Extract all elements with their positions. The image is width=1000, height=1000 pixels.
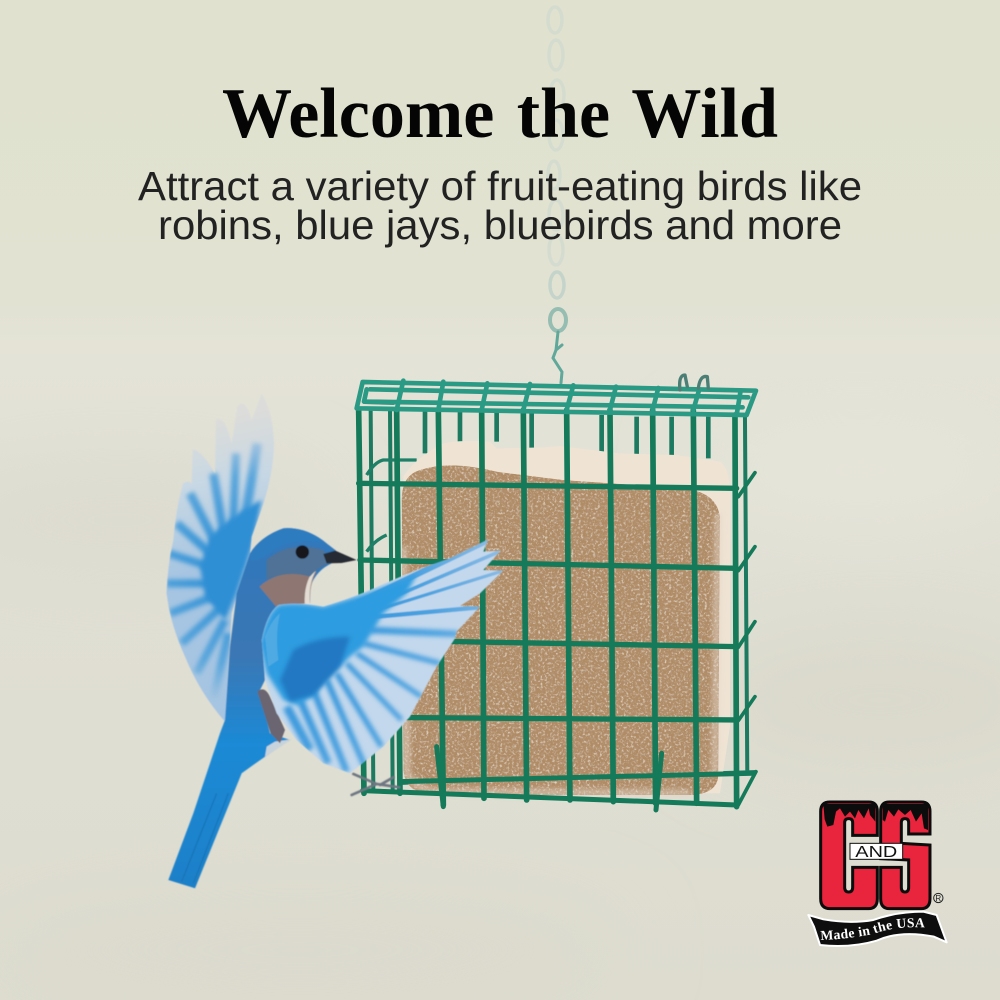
cage top frame (357, 375, 756, 415)
AND box: AND (855, 844, 897, 861)
title: Welcome the Wild (222, 75, 778, 153)
tail feather lines (182, 793, 228, 883)
hanging chain (548, 7, 566, 383)
back wing (167, 394, 274, 722)
cage front wires (359, 410, 756, 810)
AND box (850, 843, 903, 861)
letter C (821, 802, 877, 909)
cake front face (402, 465, 720, 795)
cake frosted rim (403, 513, 718, 793)
back wing coverts (200, 500, 262, 620)
flames (823, 804, 928, 830)
legs and toes (352, 774, 399, 795)
infographic canvas (138, 6, 981, 947)
logo: C and S Made in the USA (807, 800, 948, 947)
registered mark: R (935, 894, 941, 903)
subtitle line 2: robins, blue jays, bluebirds and more (158, 202, 842, 248)
letter S (881, 802, 930, 909)
white belly (265, 739, 292, 757)
subtitle line 1: Attract a variety of fruit-eating birds like (138, 163, 862, 209)
dark covert patch (280, 637, 350, 702)
beak (323, 551, 357, 563)
registered mark (934, 893, 943, 903)
cake top surface (403, 441, 730, 793)
ribbon banner: Made in the USA (820, 918, 925, 940)
crown (250, 528, 325, 560)
pale shoulder (265, 613, 280, 667)
front wing (260, 539, 503, 773)
wing coverts (260, 575, 417, 705)
bluebird (167, 394, 503, 888)
feeder cage with suet cake (357, 375, 757, 810)
suet cake (402, 441, 730, 795)
breast (259, 571, 317, 609)
eye (296, 545, 309, 559)
body and tail (168, 528, 336, 888)
face (267, 547, 332, 580)
throat (305, 569, 317, 604)
ribbon banner (807, 910, 948, 947)
cage back wires (367, 410, 757, 790)
flank (257, 689, 285, 743)
